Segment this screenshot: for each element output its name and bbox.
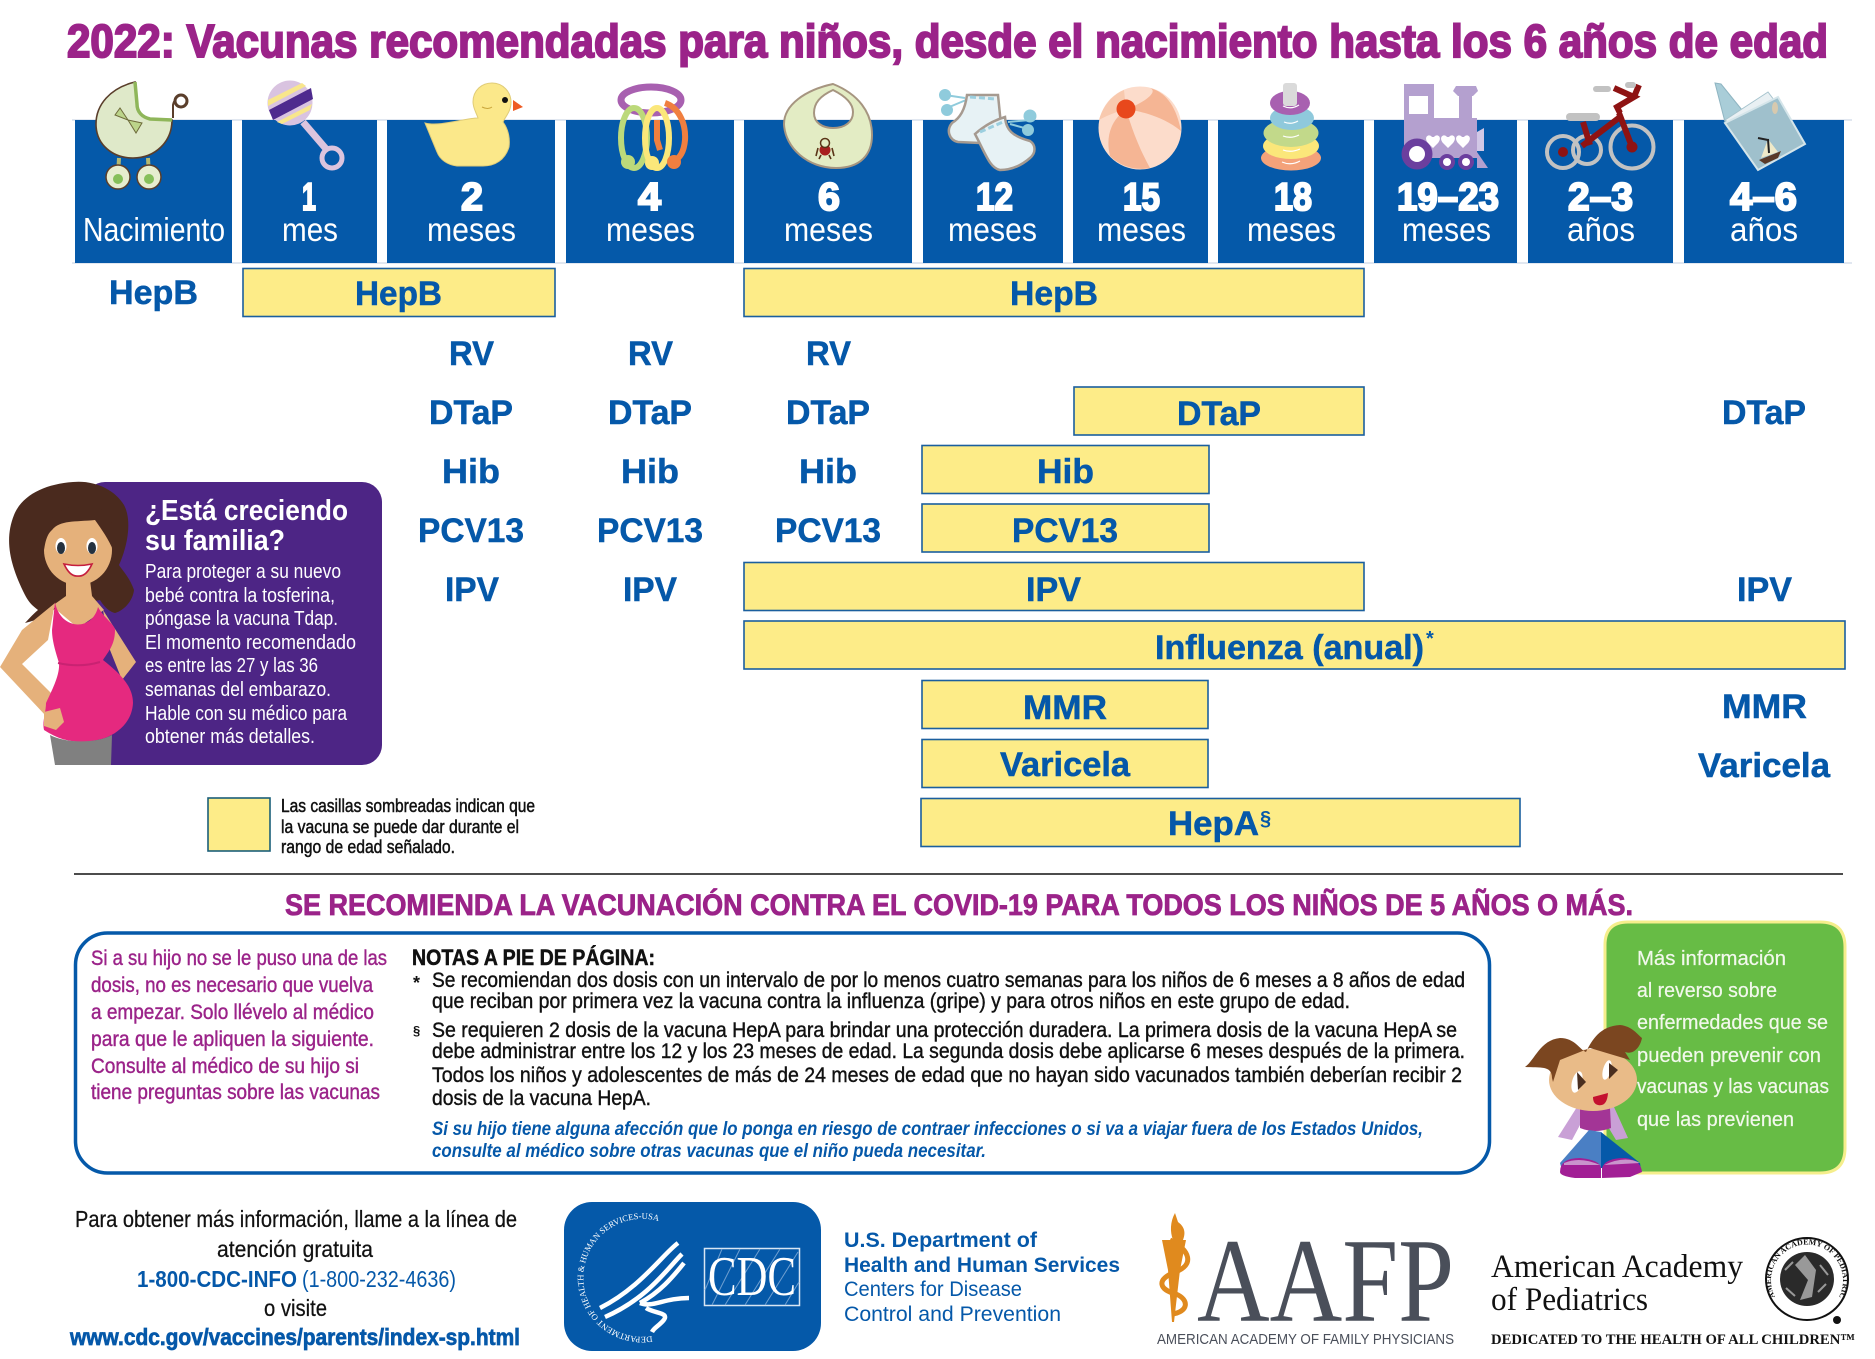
text: Tdap advice: Hable con su médico para [145,703,348,725]
column: 18 meses: 18 [1274,176,1312,219]
footnote: HepA: Se requieren 2 dosis de la vacuna HepA para brindar una protección duradera. La primera dosis de la vacuna HepA se [432,1019,1457,1042]
row: Hib: Hib [621,453,679,491]
text: Tdap advice: El momento recomendado [145,632,356,654]
text: Tdap advice: bebé contra la tosferina, [145,585,335,607]
column: 4 meses: 4 [638,176,661,219]
heading: footnotes: NOTAS A PIE DE PÁGINA: [412,945,655,970]
bar: Hib 12-15 meses: Hib [1037,453,1094,491]
logo: AAFP: AMERICAN ACADEMY OF FAMILY PHYSICIANS [1157,1331,1454,1348]
row: Hib: Hib [799,453,857,491]
row: Hib: Hib [442,453,500,491]
text: reverse side info: que las previenen [1637,1109,1794,1131]
eagle mark [600,1243,689,1332]
footnote: HepA: Todos los niños y adolescentes de más de 24 meses de edad que no hayan sido vacunados también deberían recibir 2 [432,1064,1462,1087]
row: PCV13: PCV13 [775,512,881,550]
row: IPV: IPV [1737,571,1792,609]
row: DTaP: DTaP [786,394,870,432]
heading: family: ¿Está creciendo [145,495,348,527]
legend text: la vacuna se puede dar durante el [281,817,519,837]
logo: American Academy of Pediatrics: of Pediatrics [1491,1282,1648,1318]
column: 1 mes: 1 [302,176,316,219]
row: PCV13: PCV13 [597,512,703,550]
footnote: HepA: dosis de la vacuna HepA. [432,1087,651,1110]
text: reverse side info: Más información [1637,948,1786,970]
age header band [72,120,1852,263]
column: 4 meses: meses [606,211,695,248]
bar: HepA [921,798,1520,846]
column: 12 meses [923,120,1063,263]
row: RV: RV [806,335,851,373]
heading: family [145,495,348,557]
note: travel and risk: Si su hijo tiene alguna afección que lo ponga en riesgo de contraer infecciones o si va a viajar fuera de los Estados Unidos, [432,1119,1423,1140]
row: IPV [445,562,1792,610]
text: reverse side info: al reverso sobre [1637,980,1777,1002]
column: 12 meses: 12 [976,176,1013,219]
text: missed doses: Si a su hijo no se le puso una de las [91,947,387,970]
icon: rattle [268,80,342,168]
column: 18 meses: meses [1247,211,1336,248]
bar: Influenza anual: * [1426,628,1434,650]
footnote: influenza: Se recomiendan dos dosis con un intervalo de por lo menos cuatro semanas para los niños de 6 meses a 8 años de edad [432,969,1465,992]
column: Nacimiento: Nacimiento [83,211,225,248]
CDC box: CDC [708,1246,796,1308]
text: missed doses: dosis, no es necesario que vuelva [91,974,373,997]
column: 6 meses [744,120,912,263]
icon: pregnant woman [0,482,136,765]
column: 4-6 anos [1684,120,1844,263]
logo: AAFP: AAFP [1197,1214,1454,1347]
text: contact information: 1-800-CDC-INFO [137,1266,297,1292]
footnote: HepA: debe administrar entre los 12 y los 23 meses de edad. La segunda dosis debe aplicarse 6 meses después de la primera. [432,1040,1465,1063]
heading: family: su familia? [145,525,285,557]
icon: book [1715,83,1805,170]
text: Tdap advice: semanas del embarazo. [145,679,331,701]
icon: tricycle [1547,82,1654,168]
legend text: rango de edad señalado. [281,837,455,857]
logo: HHS and CDC: DEPARTMENT OF HEALTH & HUMAN SERVICES-USA [578,1213,658,1342]
logo: HHS and CDC [564,1202,821,1351]
column: 1 mes: mes [282,211,338,248]
footnote: influenza: * [413,973,420,993]
logo: American Academy of Pediatrics: DEDICATED TO THE HEALTH OF ALL CHILDREN™ [1491,1332,1855,1348]
bar: Influenza anual [744,621,1845,669]
bar: Varicela 12-15 meses [922,740,1208,788]
bar: Hib 12-15 meses [922,446,1209,494]
text: contact information [69,1206,520,1350]
bar: PCV13 12-15 meses: PCV13 [1012,512,1118,550]
column: 15 meses [1073,120,1208,263]
text: reverse side info [1637,948,1829,1131]
bar: HepB 6-18 meses: HepB [1010,275,1098,313]
row: MMR [922,680,1807,728]
icon: toy train [1402,84,1488,170]
bar: HepB 6-18 meses [744,268,1364,316]
text: US Department of Health [844,1229,1120,1326]
bar: HepA: § [1260,808,1271,830]
column: 2 meses [387,120,555,263]
row: MMR: MMR [1722,688,1807,726]
column: 2-3 anos [1528,120,1673,263]
text: Tdap advice: obtener más detalles. [145,726,315,748]
panel: footnotes box [76,933,1490,1173]
icon: rubber duck [425,83,523,166]
text: contact information: www.cdc.gov/vaccines/parents/index-sp.html [69,1324,520,1350]
bar: HepB 1-2 meses: HepB [355,275,442,313]
text: Tdap advice: Para proteger a su nuevo [145,561,341,583]
column: 4 meses [566,120,734,263]
text: Tdap advice [145,561,356,748]
row: HepB: HepB [109,274,198,312]
column: Nacimiento [75,120,232,263]
text: US Department of Health: Centers for Disease [844,1278,1022,1301]
column: 1 mes [242,120,377,263]
row: RV: RV [628,335,673,373]
column: 19-23 meses: meses [1402,211,1491,248]
column: 15 meses: 15 [1123,176,1160,219]
bar: Influenza anual: Influenza (anual) [1155,629,1424,667]
column: 2-3 anos: años [1567,211,1635,248]
panel: more information [1605,922,1845,1173]
bar: IPV 6-18 meses [744,562,1364,610]
text: missed doses: para que le apliquen la siguiente. [91,1028,374,1051]
bar: PCV13 12-15 meses [922,504,1209,552]
column: 6 meses: meses [784,211,873,248]
text: reverse side info: vacunas y las vacunas [1637,1076,1829,1098]
text: contact information: o visite [264,1295,327,1321]
bar: DTaP 15-18 meses [1074,387,1364,435]
column: 18 meses [1218,120,1364,263]
row: RV [449,335,851,373]
icon: AAP seal: AMERICAN ACADEMY OF PEDIATRICS [1767,1239,1847,1298]
row: RV: RV [449,335,494,373]
row: DTaP [429,387,1806,435]
text: US Department of Health: Health and Human Services [844,1254,1120,1277]
row: DTaP: DTaP [429,394,513,432]
icon: stacking rings [1261,83,1321,170]
text: missed doses: a empezar. Solo llévelo al médico [91,1001,374,1024]
bar: DTaP 15-18 meses: DTaP [1177,395,1261,433]
legend text [281,796,535,857]
icon: girl [1525,1025,1642,1178]
row: PCV13 [418,504,1209,552]
row: Varicela [922,740,1831,788]
heading: COVID-19 recommendation: SE RECOMIENDA LA VACUNACIÓN CONTRA EL COVID-19 PARA TODOS LOS NIÑOS DE 5 AÑOS O MÁS. [285,888,1633,922]
legend text: Las casillas sombreadas indican que [281,796,535,816]
text: contact information: (1-800-232-4636) [302,1266,456,1292]
panel: growing family [85,482,382,765]
footnote: influenza: que reciban por primera vez la vacuna contra la influenza (gripe) y para otros niños en este grupo de edad. [432,990,1350,1013]
legend swatch [208,798,270,851]
footnote: HepA [413,1019,1465,1110]
column: 4-6 anos: años [1730,211,1798,248]
row: HepB [109,268,1364,316]
icon: AAFP staff [1162,1213,1188,1322]
column: 15 meses: meses [1097,211,1186,248]
column: 19-23 meses [1374,120,1517,263]
icon: baby carriage [96,82,187,189]
text: missed doses: Consulte al médico de su hijo si [91,1055,359,1078]
column: 2 meses: meses [427,211,516,248]
column: 2 meses: 2 [461,176,483,219]
logo: American Academy of Pediatrics: American Academy [1491,1249,1743,1285]
bar: Varicela 12-15 meses: Varicela [1000,746,1131,784]
bar: MMR 12-15 meses: MMR [1023,689,1107,727]
text: contact information: Para obtener más información, llame a la línea de [75,1206,517,1232]
row: Varicela: Varicela [1698,747,1831,785]
icon: beach ball [1098,86,1182,170]
row: Hib [442,446,1209,494]
row: DTaP: DTaP [1722,394,1806,432]
bar: HepB 1-2 meses [243,268,555,316]
legend [208,796,535,857]
row: PCV13: PCV13 [418,512,524,550]
note: travel and risk: consulte al médico sobre otras vacunas que el niño pueda necesitar. [432,1141,986,1162]
text: US Department of Health: Control and Prevention [844,1303,1061,1326]
column: 12 meses: meses [948,211,1037,248]
text: Tdap advice: es entre las 27 y las 36 [145,655,318,677]
column: 2-3 anos: 2–3 [1568,176,1633,219]
column: 4-6 anos: 4–6 [1730,176,1797,219]
text: reverse side info: pueden prevenir con [1637,1045,1821,1067]
column: 19-23 meses: 19–23 [1397,176,1499,219]
icon: teething rings [621,87,685,170]
footnote: HepA: § [413,1023,420,1038]
bar: MMR 12-15 meses [922,680,1208,728]
text: US Department of Health: U.S. Department of [844,1229,1038,1252]
text: contact information: atención gratuita [217,1236,373,1262]
row: DTaP: DTaP [608,394,692,432]
footnote: influenza [413,969,1465,1013]
text: Tdap advice: póngase la vacuna Tdap. [145,608,338,630]
bar: HepA: HepA [1168,805,1259,843]
icon: baby booties [939,89,1036,170]
text: missed doses [91,947,387,1104]
column: 6 meses: 6 [818,176,840,219]
row: IPV: IPV [445,571,499,609]
note: travel and risk [432,1119,1423,1162]
bar: IPV 6-18 meses: IPV [1026,571,1081,609]
icon: bib [784,84,872,168]
text: reverse side info: enfermedades que se [1637,1012,1828,1034]
text: missed doses: tiene preguntas sobre las vacunas [91,1081,380,1104]
row: IPV: IPV [623,571,677,609]
